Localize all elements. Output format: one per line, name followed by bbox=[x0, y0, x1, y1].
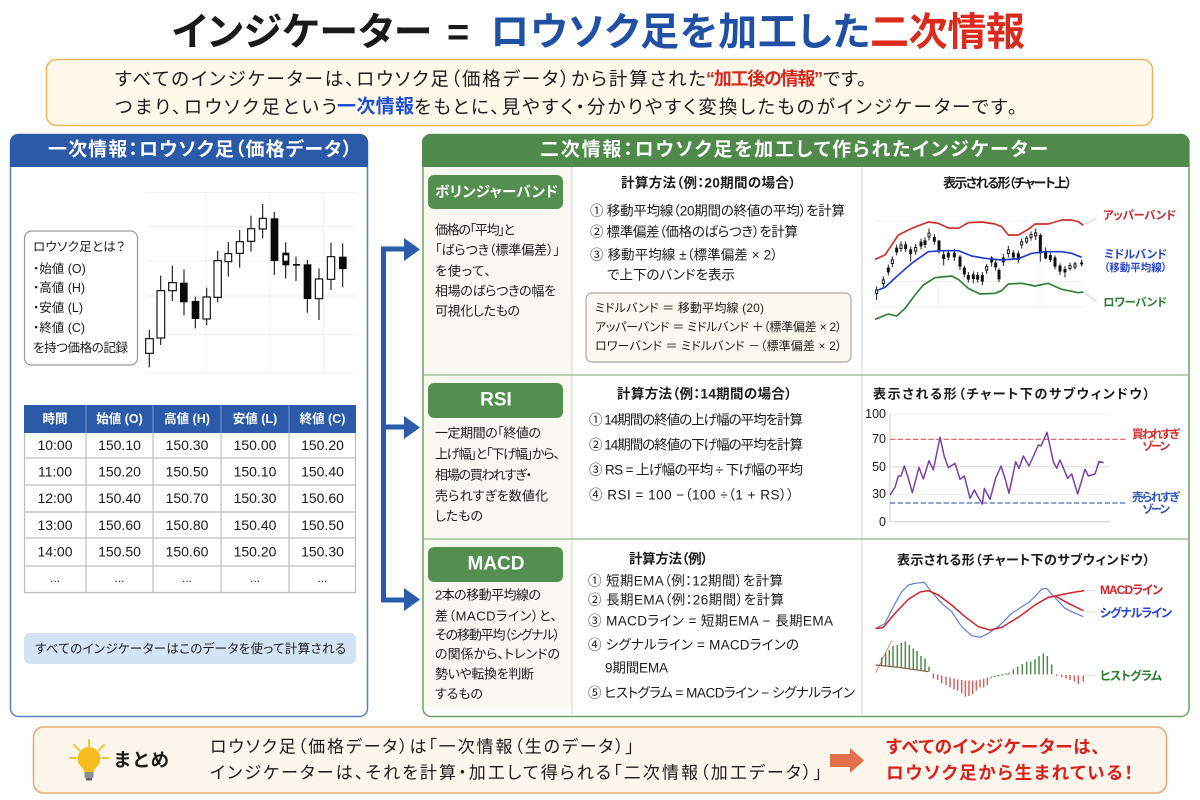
label: middle band: （移動平均線） bbox=[1104, 261, 1167, 274]
title: = bbox=[447, 12, 469, 54]
label: signal line: シグナルライン bbox=[1100, 605, 1172, 620]
title bbox=[172, 12, 1025, 54]
chart: Bollinger Bands bbox=[875, 218, 1097, 319]
description: Bollinger Bands: 「ばらつき（標準偏差）」 bbox=[435, 242, 560, 258]
OHLC data table bbox=[24, 405, 356, 592]
calculation steps: Bollinger Bands: ② 標準偏差（価格のばらつき）を計算 bbox=[590, 224, 798, 240]
chart title: MACD: 表示される形（チャート下のサブウィンドウ） bbox=[897, 552, 1150, 568]
icon: light bulb bbox=[70, 740, 108, 780]
calculation steps: Bollinger Bands: で上下のバンドを表示 bbox=[607, 268, 735, 282]
badge: MACD bbox=[428, 547, 563, 582]
calculation steps: RSI: ① 14期間の終値の上げ幅の平均を計算 bbox=[589, 412, 803, 428]
row: MACD bbox=[428, 547, 1172, 702]
description: RSI bbox=[435, 426, 560, 524]
label: oversold zone: ゾーン bbox=[1142, 503, 1170, 516]
intro callout: 一次情報 bbox=[337, 96, 414, 118]
panel heading: primary information: 一次情報：ロウソク足（価格データ） bbox=[48, 138, 352, 160]
OHLC data table: 150.60 bbox=[98, 517, 141, 533]
calculation steps: Bollinger Bands: ① 移動平均線（20期間の終値の平均）を計算 bbox=[590, 204, 845, 218]
callout: what is a candlestick: ・終値 (C) bbox=[33, 320, 85, 335]
conclusion text: ロウソク足から生まれている！ bbox=[886, 763, 1133, 783]
label: histogram: ヒストグラム bbox=[1100, 668, 1162, 683]
OHLC data table: ... bbox=[50, 571, 60, 585]
OHLC data table: 150.40 bbox=[301, 464, 344, 480]
summary text: ロウソク足（価格データ）は「一次情報（生のデータ）」 bbox=[210, 736, 634, 756]
description: RSI: 売られすぎを数値化 bbox=[435, 488, 548, 504]
description: Bollinger Bands: 価格の「平均」と bbox=[435, 222, 515, 238]
title: 二次情報 bbox=[870, 12, 1025, 54]
summary text: インジケーターは、それを計算・加工して得られる「二次情報（加工データ）」 bbox=[210, 762, 822, 782]
arrows: from primary data to each indicator bbox=[384, 238, 420, 611]
OHLC data table: 高値 (H) bbox=[164, 411, 210, 426]
OHLC data table: 150.40 bbox=[98, 490, 141, 506]
OHLC data table: 150.10 bbox=[98, 437, 141, 453]
panel heading: primary information bbox=[10, 134, 368, 167]
description: MACD: 勢いや転換を判断 bbox=[435, 666, 534, 682]
chart: RSI: 0 bbox=[879, 515, 886, 529]
intro callout: “加工後の情報” bbox=[706, 69, 823, 89]
OHLC data table: ... bbox=[317, 571, 328, 585]
candlestick chart bbox=[146, 192, 357, 373]
OHLC data table: 10:00 bbox=[37, 437, 73, 453]
summary text bbox=[210, 736, 822, 782]
OHLC data table: ... bbox=[182, 571, 192, 585]
badge: RSI bbox=[428, 383, 563, 418]
panel: secondary information bbox=[422, 134, 1189, 716]
intro callout: すべてのインジケーターは、ロウソク足（価格データ）から計算された bbox=[115, 68, 706, 90]
callout: what is a candlestick: ・高値 (H) bbox=[33, 280, 85, 295]
chart: RSI: 50 bbox=[872, 460, 886, 474]
OHLC data table: 11:00 bbox=[38, 464, 72, 480]
OHLC data table: 150.60 bbox=[301, 490, 344, 506]
OHLC data table: 13:00 bbox=[37, 517, 73, 533]
chart: RSI: 30 bbox=[872, 487, 886, 501]
badge: Bollinger Bands bbox=[428, 175, 563, 209]
intro callout: つまり、ロウソク足という bbox=[115, 96, 337, 118]
title: インジケーター bbox=[172, 12, 432, 54]
description: RSI: 相場の買われすぎ・ bbox=[435, 468, 532, 482]
calculation steps: Bollinger Bands: ③ 移動平均線 ±（標準偏差 × 2） bbox=[590, 248, 778, 262]
formula box: Bollinger Bands bbox=[586, 293, 851, 362]
description: Bollinger Bands: を使って、 bbox=[435, 264, 491, 278]
calculation steps: MACD: ③ MACDライン = 短期EMA − 長期EMA bbox=[588, 614, 833, 628]
OHLC data table: 終値 (C) bbox=[300, 411, 345, 426]
OHLC data table: 150.30 bbox=[234, 490, 277, 506]
OHLC data table: 150.20 bbox=[98, 464, 141, 480]
calculation steps: Bollinger Bands: 計算方法（例：20期間の場合） bbox=[621, 174, 796, 190]
OHLC data table: 安値 (L) bbox=[233, 411, 277, 426]
description: MACD: の関係から、トレンドの bbox=[435, 646, 560, 662]
label: overbought zone: 買われすぎ bbox=[1132, 427, 1181, 441]
OHLC data table: ... bbox=[250, 571, 260, 585]
callout: what is a candlestick: ・始値 (O) bbox=[33, 261, 86, 276]
formula box: Bollinger Bands: ミドルバンド ＝ 移動平均線 (20) bbox=[595, 300, 764, 315]
OHLC data table: 150.50 bbox=[98, 544, 141, 560]
OHLC data table: 始値 (O) bbox=[96, 411, 143, 426]
chart title: RSI: 表示される形（チャート下のサブウィンドウ） bbox=[873, 386, 1150, 402]
label: upper band: アッパーバンド bbox=[1103, 209, 1176, 222]
label: middle band: ミドルバンド bbox=[1104, 248, 1167, 261]
row: RSI bbox=[428, 383, 1181, 529]
calculation steps: MACD bbox=[588, 550, 855, 700]
label: lower band: ロワーバンド bbox=[1103, 296, 1167, 309]
OHLC data table: 150.20 bbox=[301, 437, 344, 453]
OHLC data table: 150.10 bbox=[234, 464, 277, 480]
conclusion text bbox=[886, 737, 1133, 783]
OHLC data table: 150.20 bbox=[234, 544, 277, 560]
label: oversold zone bbox=[1132, 490, 1181, 516]
calculation steps: RSI: ④ RSI = 100 −（100 ÷（1 + RS）） bbox=[589, 488, 794, 502]
badge: MACD: MACD bbox=[468, 554, 524, 574]
description: Bollinger Bands: 可視化したもの bbox=[435, 304, 520, 318]
OHLC data table: 150.30 bbox=[301, 544, 344, 560]
description: Bollinger Bands: 相場のばらつきの幅を bbox=[435, 284, 556, 298]
calculation steps: MACD: ① 短期EMA（例：12期間）を計算 bbox=[588, 574, 783, 588]
OHLC data table: 150.00 bbox=[234, 437, 277, 453]
chart: RSI: 100 bbox=[865, 407, 886, 421]
callout: what is a candlestick bbox=[24, 231, 138, 365]
OHLC data table: ... bbox=[114, 571, 125, 585]
panel heading: secondary information: 二次情報：ロウソク足を加工して作られたインジケーター bbox=[540, 138, 1048, 160]
panel: primary information bbox=[10, 134, 368, 716]
callout: what is a candlestick: ・安値 (L) bbox=[33, 300, 83, 315]
label: overbought zone: ゾーン bbox=[1142, 440, 1170, 453]
calculation steps: Bollinger Bands bbox=[590, 174, 845, 282]
badge: Bollinger Bands: ボリンジャーバンド bbox=[435, 184, 558, 201]
intro callout: をもとに、見やすく・分かりやすく変換したものがインジケーターです。 bbox=[414, 96, 1017, 118]
label: overbought zone bbox=[1132, 427, 1181, 453]
OHLC data table: 150.40 bbox=[234, 517, 277, 533]
description: Bollinger Bands bbox=[435, 222, 560, 318]
formula box: Bollinger Bands: ロワーバンド ＝ ミドルバンド －（標準偏差 × 2） bbox=[595, 338, 842, 353]
OHLC data table: 14:00 bbox=[37, 544, 73, 560]
calculation steps: RSI: 計算方法（例：14期間の場合） bbox=[617, 386, 792, 402]
title: ロウソク足を加工した bbox=[490, 12, 870, 54]
label: summary: まとめ bbox=[114, 750, 169, 770]
calculation steps: MACD: ⑤ ヒストグラム = MACDライン − シグナルライン bbox=[588, 686, 855, 700]
description: RSI: したもの bbox=[435, 508, 483, 524]
OHLC data table: 時間 bbox=[42, 411, 68, 426]
label: MACD line: MACDライン bbox=[1100, 583, 1163, 597]
OHLC data table: 150.80 bbox=[166, 517, 209, 533]
conclusion text: すべてのインジケーターは、 bbox=[886, 737, 1100, 757]
callout: what is a candlestick: ロウソク足とは？ bbox=[33, 240, 125, 254]
OHLC data table: 150.50 bbox=[166, 464, 209, 480]
formula box: Bollinger Bands: アッパーバンド ＝ ミドルバンド ＋（標準偏差 × 2） bbox=[595, 319, 842, 334]
calculation steps: MACD: ④ シグナルライン = MACDラインの bbox=[588, 638, 799, 652]
calculation steps: MACD: ② 長期EMA（例：26期間）を計算 bbox=[588, 592, 784, 608]
note: all indicators use this data: すべてのインジケーターはこのデータを使って計算される bbox=[35, 641, 346, 656]
badge: RSI: RSI bbox=[480, 390, 512, 410]
label: middle band bbox=[1104, 248, 1167, 274]
description: MACD: するもの bbox=[435, 686, 483, 702]
summary band bbox=[34, 727, 1166, 793]
calculation steps: MACD: 計算方法（例） bbox=[629, 550, 708, 566]
callout: what is a candlestick: を持つ価格の記録 bbox=[33, 340, 128, 355]
arrow: to conclusion bbox=[830, 748, 864, 773]
chart: RSI bbox=[865, 407, 1127, 529]
chart: RSI: 70 bbox=[872, 432, 886, 446]
chart title: Bollinger Bands: 表示される形（チャート上） bbox=[943, 176, 1072, 190]
OHLC data table: 150.70 bbox=[166, 490, 209, 506]
panel heading: secondary information bbox=[422, 134, 1189, 167]
description: MACD: その移動平均（シグナル） bbox=[435, 628, 560, 642]
description: MACD bbox=[435, 588, 560, 702]
description: MACD: 2本の移動平均線の bbox=[435, 588, 541, 602]
intro callout: です。 bbox=[823, 68, 867, 90]
chart: MACD lines and histogram bbox=[876, 582, 1097, 697]
OHLC data table: 150.50 bbox=[301, 517, 344, 533]
description: MACD: 差（MACDライン）と、 bbox=[435, 608, 557, 624]
OHLC data table: 150.30 bbox=[166, 437, 209, 453]
label: oversold zone: 売られすぎ bbox=[1132, 490, 1181, 504]
calculation steps: RSI bbox=[589, 386, 803, 502]
row: Bollinger Bands bbox=[428, 174, 1176, 362]
calculation steps: RSI: ③ RS = 上げ幅の平均 ÷ 下げ幅の平均 bbox=[589, 462, 803, 478]
note: all indicators use this data bbox=[24, 633, 356, 664]
description: RSI: 上げ幅」と「下げ幅」から、 bbox=[435, 446, 560, 462]
description: RSI: 一定期間の「終値の bbox=[435, 426, 541, 440]
calculation steps: MACD: 9期間EMA bbox=[605, 660, 668, 676]
OHLC data table: 12:00 bbox=[37, 490, 73, 506]
intro callout bbox=[46, 60, 1152, 126]
OHLC data table: 150.60 bbox=[166, 544, 209, 560]
calculation steps: RSI: ② 14期間の終値の下げ幅の平均を計算 bbox=[589, 438, 803, 452]
